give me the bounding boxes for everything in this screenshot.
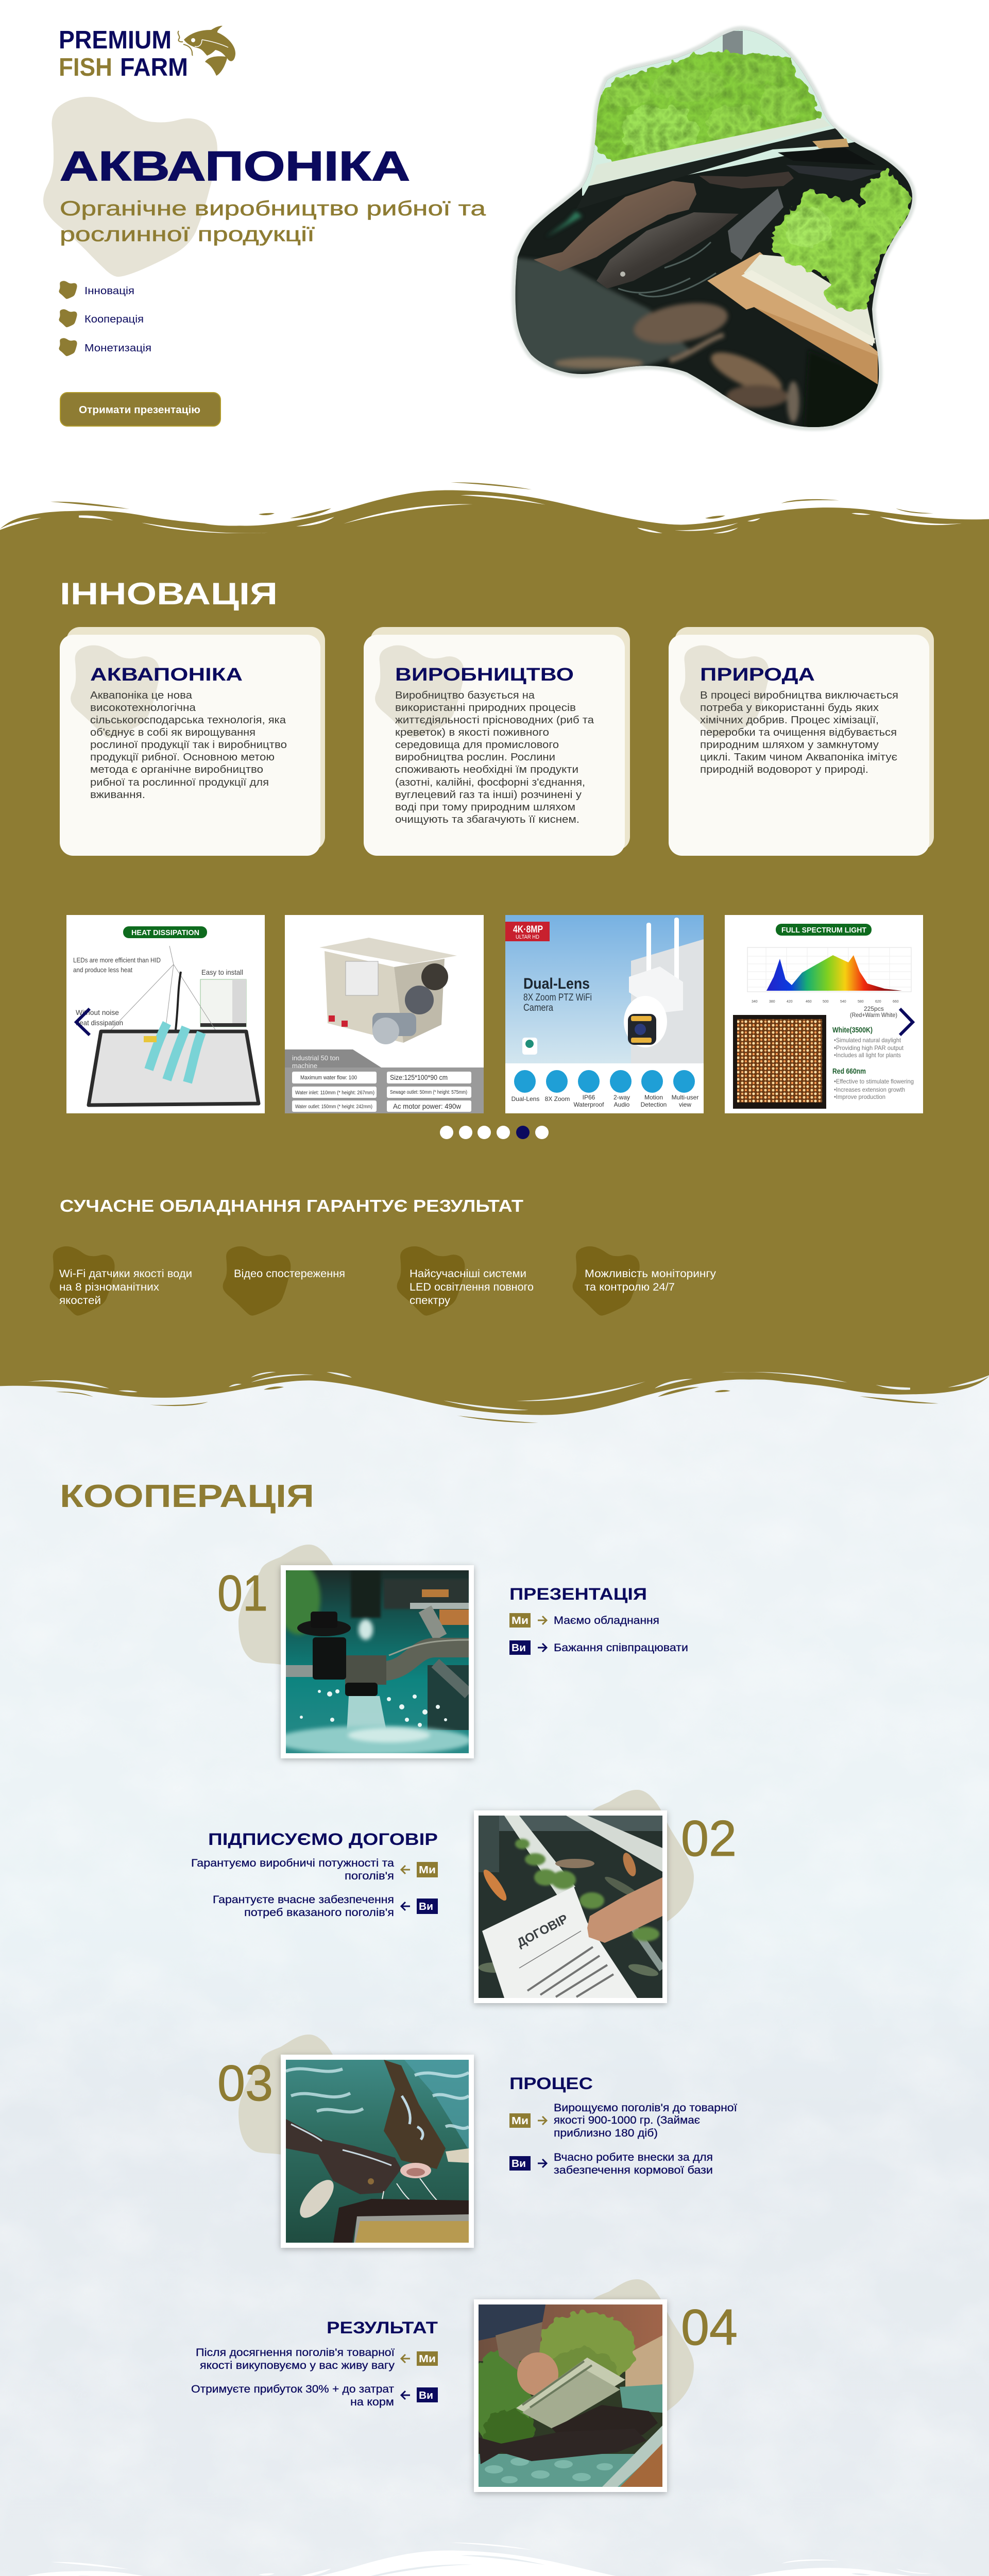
card text: (азотні, калійні, фосфорні з'єднання,	[395, 777, 585, 788]
slide: full spectrum light: 660	[893, 1000, 899, 1004]
slide: camera: view	[679, 1101, 691, 1108]
slide: heat dissipation: HEAT DISSIPATION	[131, 928, 199, 937]
feature: video surveillance: Відео спостереження	[234, 1268, 345, 1280]
step number: 03	[217, 2055, 273, 2111]
badge: we	[401, 1862, 438, 1877]
slide: full spectrum light: •Effective to stimulate flowering	[834, 1078, 914, 1085]
feature: LED lighting	[397, 1246, 534, 1316]
navigation list	[59, 281, 151, 356]
slide: camera: Dual-Lens	[523, 975, 590, 992]
card text: природним шляхом у замкнутому	[700, 739, 879, 751]
slide: camera: 4K·8MP	[513, 924, 543, 935]
card title: ПРИРОДА	[700, 665, 815, 685]
feature: monitoring: та контролю 24/7	[585, 1281, 675, 1293]
step text: ПРЕЗЕНТАЦІЯ	[509, 1585, 647, 1603]
step number: 04	[681, 2299, 738, 2355]
slide: camera: Audio	[614, 1101, 630, 1108]
slide: camera: Multi-user	[672, 1094, 698, 1101]
step photo	[474, 1810, 667, 2003]
slide: heat dissipation: Without noise	[76, 1008, 119, 1016]
badge: you: Ви	[419, 2390, 433, 2401]
slide: filter unit: industrial 50 ton	[292, 1054, 339, 1062]
slide: camera: IP66	[583, 1094, 595, 1101]
slide: camera: Dual-Lens	[511, 1095, 539, 1103]
step text	[509, 2074, 737, 2176]
step 03: process	[217, 2035, 737, 2248]
slide: camera: 8X Zoom	[545, 1095, 570, 1103]
card text: виробництва рослин. Рослини	[395, 752, 555, 763]
step text: РЕЗУЛЬТАТ	[327, 2318, 438, 2337]
feature: LED lighting: LED освітлення повного	[410, 1281, 534, 1293]
button: Отримати презентацію	[79, 404, 200, 416]
card text: потреба у використанні будь яких	[700, 702, 879, 714]
feature: water sensors: на 8 різноманітних	[59, 1281, 160, 1293]
slide: camera: Camera	[523, 1003, 553, 1013]
card text: життєдіяльності прісноводних (риб та	[395, 715, 594, 726]
badge: we: Ми	[511, 2115, 528, 2127]
step 02: contract	[191, 1790, 737, 2003]
subtitle: Органічне виробництво рибної та	[60, 197, 486, 220]
slide: filter unit: Maximum water flow: 100	[300, 1075, 357, 1081]
badge: you	[401, 2387, 438, 2402]
slide: heat dissipation: heat dissipation	[76, 1019, 123, 1027]
slide: full spectrum light	[725, 915, 923, 1113]
card text: вживання.	[90, 789, 145, 801]
feature: water sensors: Wi-Fi датчики якості води	[59, 1268, 192, 1280]
card text	[90, 690, 287, 801]
slide: full spectrum light: 540	[840, 1000, 846, 1004]
step text	[191, 2318, 438, 2408]
step text: Вирощуємо поголів'я до товарної	[554, 2102, 737, 2114]
light textured background	[0, 1360, 989, 2576]
step text	[509, 1585, 688, 1655]
badge: we: Ми	[419, 1865, 436, 1876]
feature: LED lighting: спектру	[410, 1295, 451, 1307]
slide: full spectrum light: 380	[769, 1000, 775, 1004]
navigation list: Інновація	[84, 285, 134, 297]
logo	[59, 26, 235, 81]
step text: ПІДПИСУЄМО ДОГОВІР	[208, 1830, 438, 1849]
slide: camera: Detection	[641, 1101, 667, 1108]
card text: вуглецевий газ та інші) розчинені у	[395, 789, 582, 801]
card text: продукції рибної. Основною метою	[90, 752, 275, 763]
step text: приблизно 180 діб)	[554, 2127, 658, 2139]
wave divider: bottom of innovation	[0, 1365, 989, 1423]
slide: filter unit	[285, 915, 484, 1113]
step text: поголів'я	[345, 1870, 394, 1882]
badge: we: Ми	[511, 1615, 528, 1626]
feature: monitoring: Можливість моніторингу	[585, 1268, 717, 1280]
arrow: previous	[76, 1009, 90, 1035]
step number: 01	[217, 1565, 268, 1621]
slide: heat dissipation: Easy to install	[201, 968, 243, 976]
slide: full spectrum light: •Simulated natural daylight	[834, 1037, 901, 1044]
logo: FISH	[59, 54, 112, 81]
card text: циклі. Таким чином Аквапоніка імітує	[700, 752, 897, 763]
navigation list: Монетизація	[84, 343, 151, 354]
card text: сільськогосподарська технологія, яка	[90, 715, 286, 726]
subtitle	[60, 197, 486, 246]
step text: Вчасно робите внески за для	[554, 2151, 713, 2163]
card text: метода є органічне виробництво	[90, 764, 263, 775]
card: aquaponics	[60, 627, 325, 856]
heading: modern equipment: СУЧАСНЕ ОБЛАДНАННЯ ГАРАНТУЄ РЕЗУЛЬТАТ	[60, 1196, 523, 1215]
card text	[700, 690, 898, 775]
slide: full spectrum light: White(3500K)	[832, 1026, 873, 1035]
slide: camera: Waterproof	[574, 1101, 604, 1108]
heading: innovation: ІННОВАЦІЯ	[60, 577, 278, 611]
decorative blob behind title	[43, 97, 217, 277]
step text: якості викуповуємо у вас живу вагу	[200, 2360, 395, 2371]
step text: на корм	[350, 2396, 394, 2408]
step text: Гарантуємо виробничі потужності та	[191, 1857, 394, 1869]
slide: camera	[505, 915, 704, 1113]
logo: PREMIUM	[59, 26, 172, 54]
card text: рибної та рослинної продукції для	[90, 777, 269, 788]
slide: heat dissipation: and produce less heat	[73, 966, 132, 974]
card text: переробки та очищення відбувається	[700, 727, 897, 738]
slide: full spectrum light: 500	[823, 1000, 829, 1004]
step text: Отримуєте прибуток 30% + до затрат	[191, 2383, 394, 2395]
step 01: presentation	[217, 1545, 688, 1758]
badge: you: Ви	[419, 1901, 433, 1912]
slide: filter unit: Sewage outlet: 50mm (* height: 575mm)	[390, 1090, 467, 1095]
badge: you	[509, 2156, 547, 2171]
slide: heat dissipation	[66, 915, 265, 1113]
slide: full spectrum light: FULL SPECTRUM LIGHT	[781, 926, 866, 935]
pagination dots	[440, 1126, 549, 1139]
card text	[395, 690, 594, 825]
slide: filter unit: Water inlet: 110mm (* height: 267mm)	[295, 1090, 374, 1096]
feature: water sensors	[49, 1246, 192, 1316]
slide: full spectrum light: 225pcs	[864, 1005, 884, 1012]
card text: об'єднує в собі як вирощування	[90, 727, 255, 738]
step text: ПРОЦЕС	[509, 2074, 593, 2093]
slide: camera: 2-way	[613, 1094, 630, 1101]
slide: full spectrum light: (Red+Warm White)	[850, 1011, 897, 1019]
title: АКВАПОНІКА	[60, 143, 410, 190]
slide: full spectrum light: •Includes all light for plants	[834, 1052, 901, 1059]
step text	[191, 1830, 438, 1919]
step text: забезпечення кормової бази	[554, 2164, 713, 2176]
white wave into monetization	[0, 2543, 989, 2576]
step photo	[471, 2299, 667, 2492]
card title: АКВАПОНІКА	[90, 665, 243, 685]
badge: you: Ви	[511, 1642, 526, 1654]
badge: we	[401, 2351, 438, 2366]
card title: ВИРОБНИЦТВО	[395, 665, 574, 685]
slide: full spectrum light: •Providing high PAR output	[834, 1044, 904, 1052]
feature: monitoring	[573, 1246, 717, 1316]
badge: you: Ви	[511, 2158, 526, 2170]
heading: cooperation: КООПЕРАЦІЯ	[60, 1479, 314, 1514]
step text: Маємо обладнання	[554, 1615, 659, 1626]
equipment carousel	[66, 915, 923, 1139]
slide: heat dissipation: LEDs are more efficient than HID	[73, 956, 161, 964]
feature: LED lighting: Найсучасніші системи	[410, 1268, 526, 1280]
card: nature	[669, 627, 934, 856]
badge: you	[401, 1899, 438, 1914]
card text: Аквапоніка це нова	[90, 690, 193, 701]
navigation list: Кооперація	[84, 314, 144, 325]
hero photo blob	[510, 21, 922, 433]
step photo	[276, 1563, 474, 1758]
innovation section background	[0, 538, 989, 1368]
card text: середовища для промислового	[395, 739, 559, 751]
slide: full spectrum light: 460	[806, 1000, 812, 1004]
slide: filter unit: Size:125*100*90 cm	[390, 1073, 448, 1081]
slide: camera: ULTAR HD	[516, 934, 539, 940]
card text: Виробництво базується на	[395, 690, 535, 701]
wave divider: top of innovation	[0, 482, 989, 540]
step photo: ДОГОВІР	[515, 1912, 570, 1950]
card text: В процесі виробництва виключається	[700, 690, 898, 701]
card text: рослиної продукції так і виробництво	[90, 739, 287, 751]
slide: camera: Motion	[644, 1094, 663, 1101]
card text: креветок) в якості поживного	[395, 727, 549, 738]
slide: full spectrum light: 580	[858, 1000, 864, 1004]
arrow: next	[900, 1009, 913, 1035]
card text: використанні природних процесів	[395, 702, 576, 714]
badge: we	[509, 1613, 547, 1628]
step 04: result	[191, 2279, 738, 2492]
step number: 02	[681, 1810, 737, 1867]
card text: хімічних добрив. Процес хімізації,	[700, 715, 879, 726]
card text: воді при тому природним шляхом	[395, 802, 575, 813]
hero section	[43, 21, 922, 433]
card text: споживають необхідні їм продукти	[395, 764, 578, 775]
badge: we	[509, 2113, 547, 2128]
slide: filter unit: machine	[292, 1062, 317, 1070]
slide: full spectrum light: •Increases extension growth	[834, 1086, 905, 1093]
slide: filter unit: Ac motor power: 490w	[393, 1102, 462, 1110]
card: production	[364, 627, 630, 856]
card text: природній водоворот у природі.	[700, 764, 868, 775]
feature: video surveillance	[223, 1246, 345, 1316]
step text: Гарантуєте вчасне забезпечення	[213, 1894, 394, 1906]
step photo	[281, 2055, 474, 2248]
slide: full spectrum light: 340	[752, 1000, 758, 1004]
step text: Після досягнення поголів'я товарної	[196, 2347, 395, 2359]
slide: camera: 8X Zoom PTZ WiFi	[523, 992, 592, 1003]
badge: we: Ми	[419, 2353, 436, 2365]
step text: якості 900-1000 гр. (Займає	[554, 2114, 700, 2126]
slide: full spectrum light: 420	[787, 1000, 793, 1004]
card text: очищують та збагачують її киснем.	[395, 814, 579, 825]
step text: Бажання співпрацювати	[554, 1642, 688, 1654]
badge: you	[509, 1640, 547, 1655]
slide: full spectrum light: •Improve production	[834, 1093, 885, 1100]
button	[60, 393, 220, 426]
subtitle: рослинної продукції	[60, 223, 315, 246]
logo: FARM	[120, 54, 188, 81]
slide: full spectrum light: 620	[875, 1000, 881, 1004]
slide: filter unit: Water outlet: 150mm (* height: 242mm)	[295, 1104, 372, 1110]
feature: water sensors: якостей	[59, 1295, 101, 1307]
step text: потреб вказаного поголів'я	[244, 1907, 394, 1919]
slide: full spectrum light: Red 660nm	[832, 1067, 866, 1076]
card text: високотехнологічна	[90, 702, 196, 714]
